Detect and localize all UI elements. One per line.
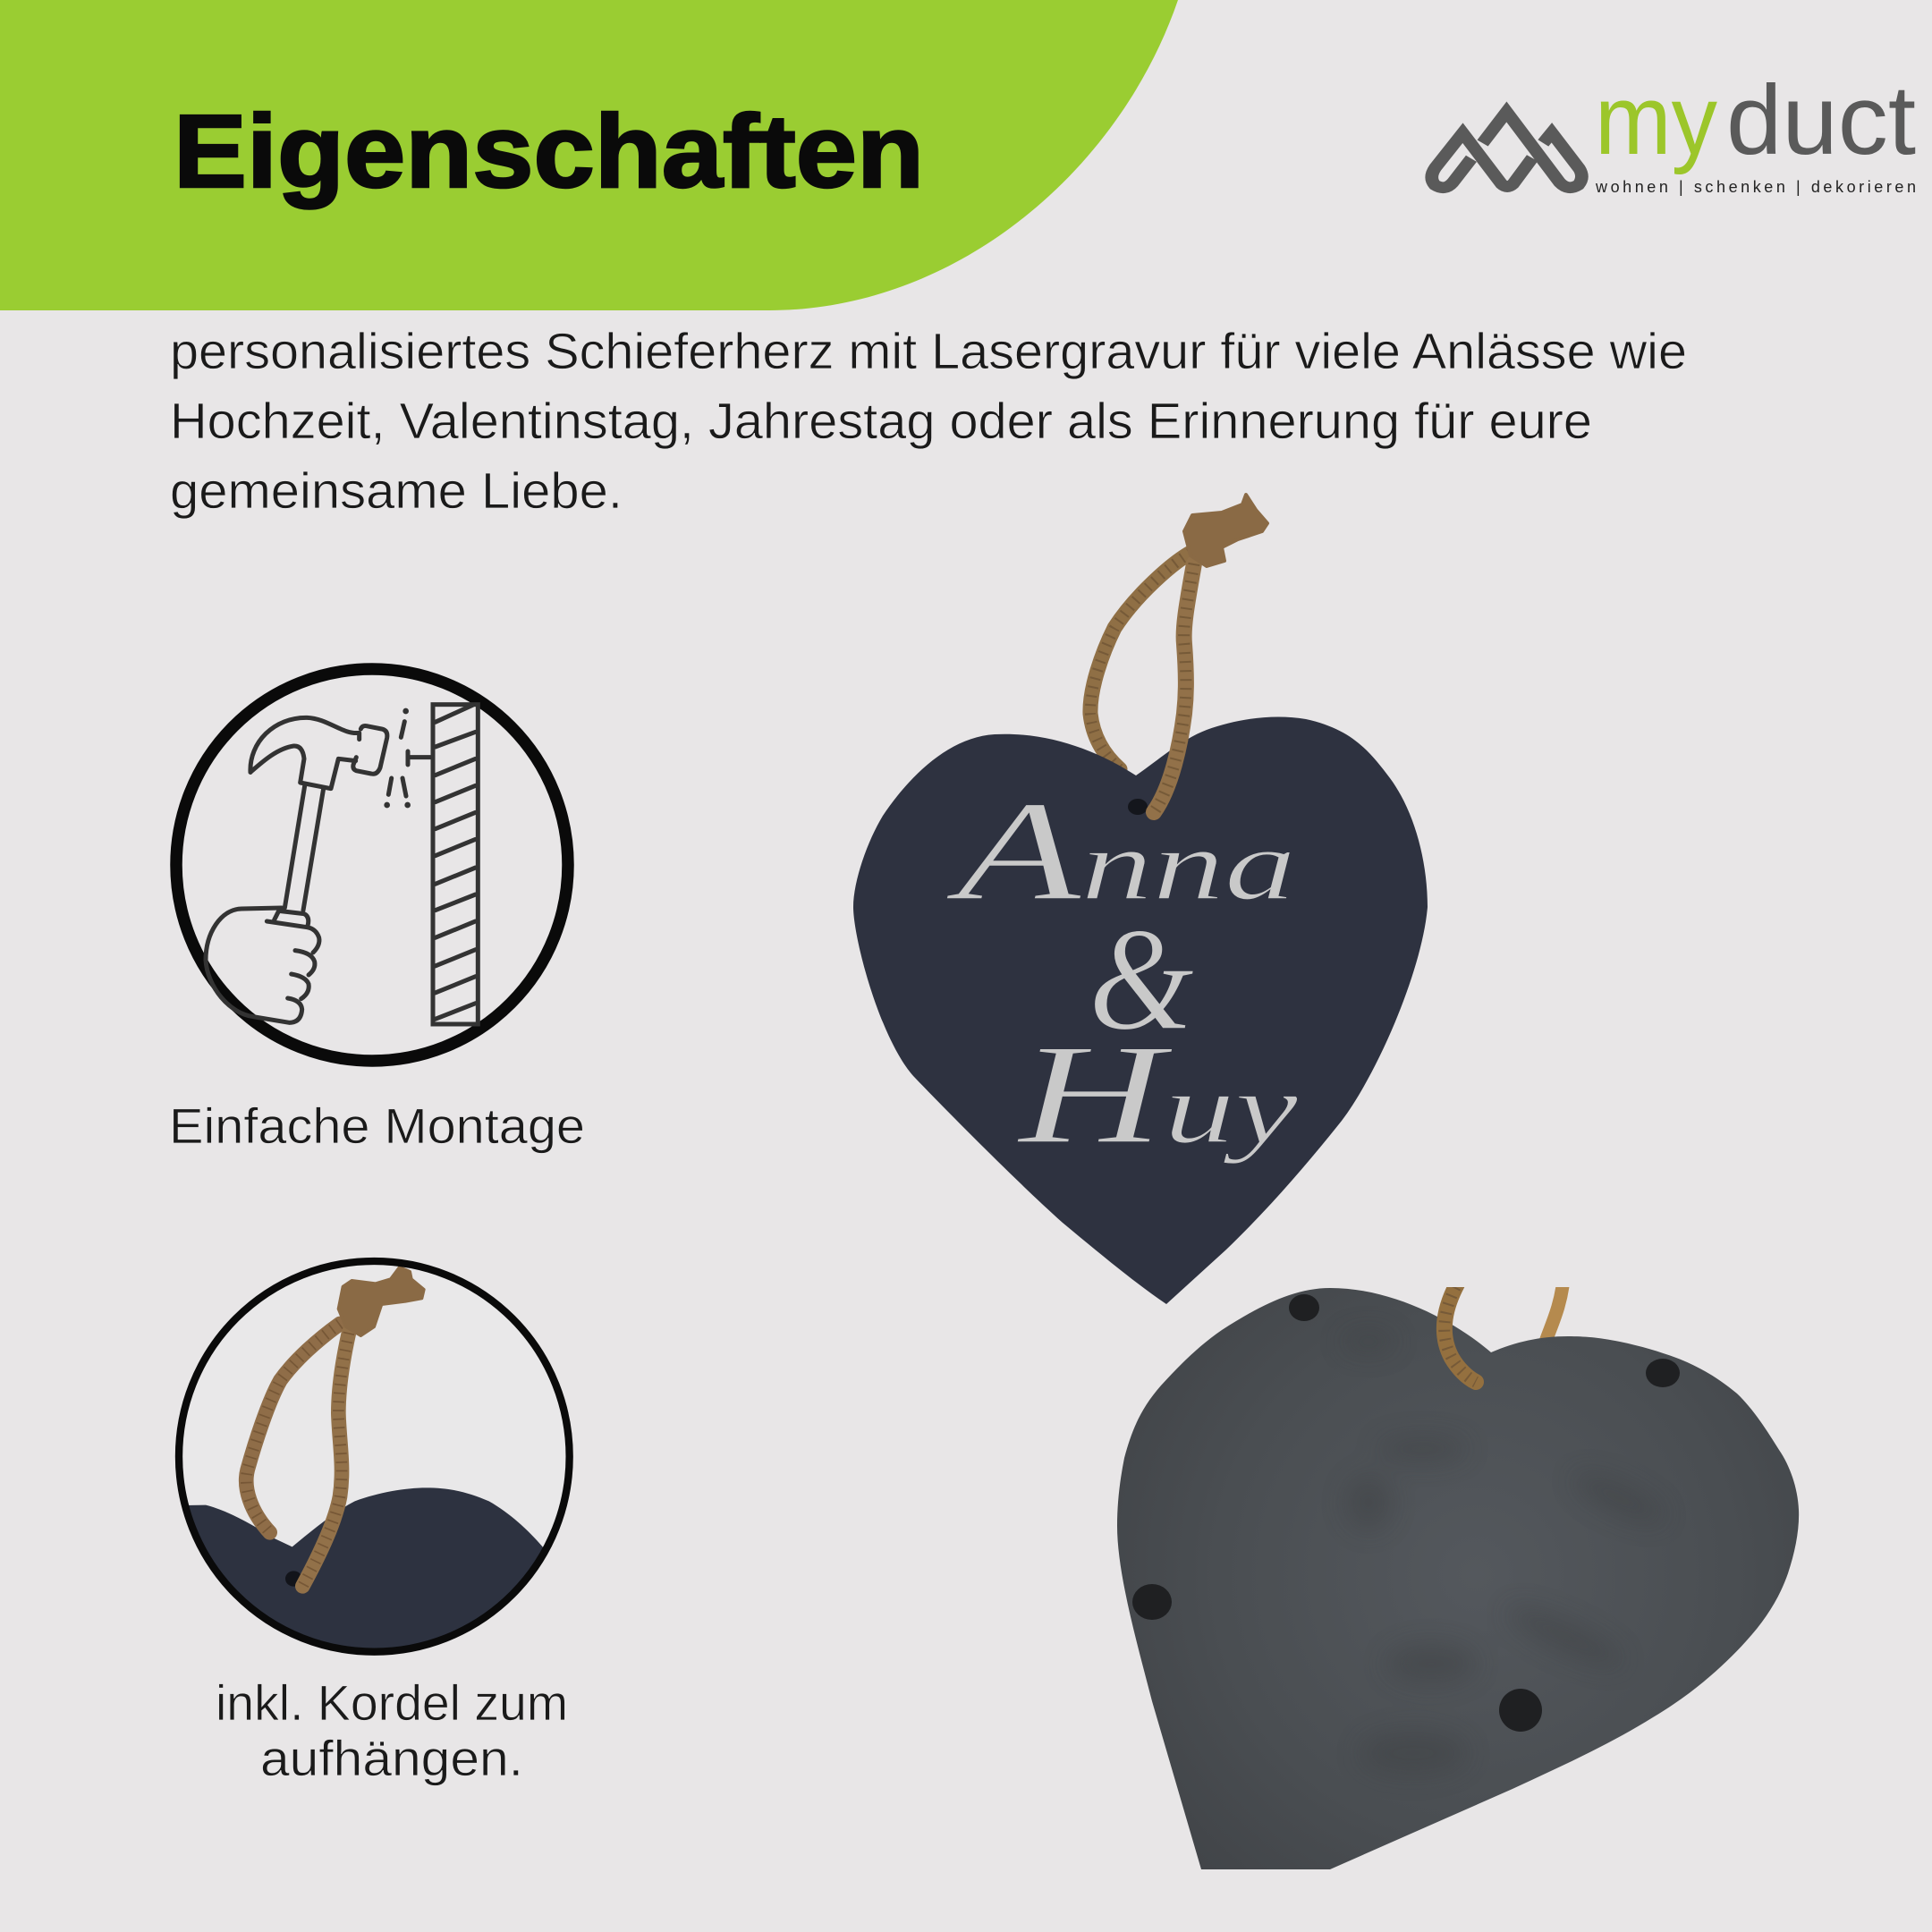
description text <box>170 323 1687 520</box>
felt foot: bottom <box>1499 1689 1542 1732</box>
front strand of cord <box>1154 564 1194 812</box>
felt foot: top right <box>1646 1359 1680 1387</box>
logo: myduct <box>1432 65 1916 196</box>
cord <box>246 1324 349 1586</box>
felt foot: left <box>1132 1584 1172 1620</box>
line 1: personalisiertes Schieferherz mit Lasergravur für viele Anlässe wie <box>170 323 1687 380</box>
line 2: Hochzeit, Valentinstag, Jahrestag oder als Erinnerung für eure <box>170 393 1592 450</box>
title: Eigenschaften <box>174 93 924 209</box>
back slate heart <box>1117 1279 1799 1869</box>
icon: hammer and wall in circle <box>176 669 568 1061</box>
engraving: Anna: A nna <box>945 771 1296 930</box>
caption: inkl. Kordel zum aufhängen <box>216 1674 568 1786</box>
cord through hole <box>1445 1279 1476 1382</box>
back cord behind heart <box>1546 1279 1563 1342</box>
cord knot <box>338 1267 424 1335</box>
surface marks <box>1342 1331 1670 1775</box>
circle ring <box>176 669 568 1061</box>
caption line 2: aufhängen. <box>260 1730 523 1786</box>
front slate heart <box>853 495 1428 1304</box>
engraving: Huy: H uy <box>1016 1014 1299 1174</box>
logo wordmark 2: duct <box>1726 65 1916 175</box>
cord hole <box>1128 799 1148 815</box>
felt foot: top left <box>1289 1294 1319 1321</box>
logo mark <box>1432 112 1581 188</box>
circle ring <box>179 1261 570 1652</box>
logo wordmark: my <box>1595 65 1717 175</box>
engraving: ampersand: & <box>1089 897 1194 1061</box>
cord hole <box>285 1571 302 1587</box>
cord knot <box>1184 495 1267 566</box>
circle interior <box>177 1259 571 1653</box>
green header shape <box>0 0 1178 310</box>
slate heart crop <box>189 1487 543 1648</box>
photo circle: cord close-up <box>175 1258 573 1656</box>
heart shape <box>853 716 1428 1304</box>
caption: Einfache Montage: Einfache Montage <box>169 1097 585 1154</box>
heart shape <box>1117 1288 1799 1869</box>
caption line 1: inkl. Kordel zum <box>216 1674 568 1731</box>
line 3: gemeinsame Liebe. <box>170 462 623 520</box>
back strand of cord <box>1090 553 1191 769</box>
hammer, fist, nail and wall <box>206 705 478 1024</box>
logo tagline: wohnen | schenken | dekorieren <box>1595 178 1916 196</box>
